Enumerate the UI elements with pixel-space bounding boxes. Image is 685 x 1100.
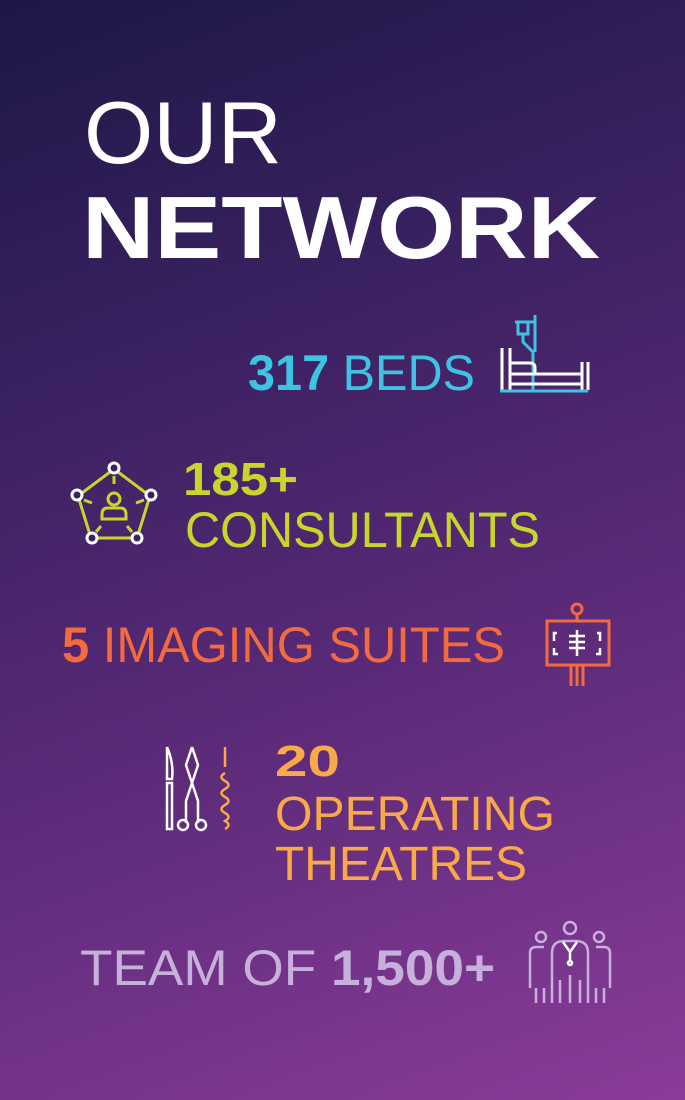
icon: consultant network: [72, 463, 156, 543]
stat: operating theatres: [167, 737, 555, 891]
stat: operating theatres: OPERATING: [275, 788, 555, 841]
title: OUR: [84, 83, 282, 182]
title: NETWORK: [82, 178, 600, 277]
stat: consultants: [72, 453, 540, 558]
stat: imaging suites: [62, 604, 609, 686]
icon: team: [530, 922, 610, 1003]
stat: team: [80, 922, 610, 1003]
stat: operating theatres: 20: [275, 737, 340, 786]
stat: imaging suites: 5 IMAGING SUITES: [62, 617, 505, 673]
stat: consultants: CONSULTANTS: [185, 502, 540, 558]
stat: consultants: 185+: [183, 453, 298, 505]
stat: beds: 317 BEDS: [248, 345, 475, 401]
icon: x-ray: [547, 604, 609, 686]
icon: surgical tools: [167, 747, 228, 830]
icon: hospital bed: [500, 315, 588, 391]
title: [82, 83, 600, 277]
stat: team: TEAM OF 1,500+: [80, 940, 495, 996]
stat: operating theatres: THEATRES: [275, 838, 527, 891]
stat: beds: [248, 315, 588, 401]
